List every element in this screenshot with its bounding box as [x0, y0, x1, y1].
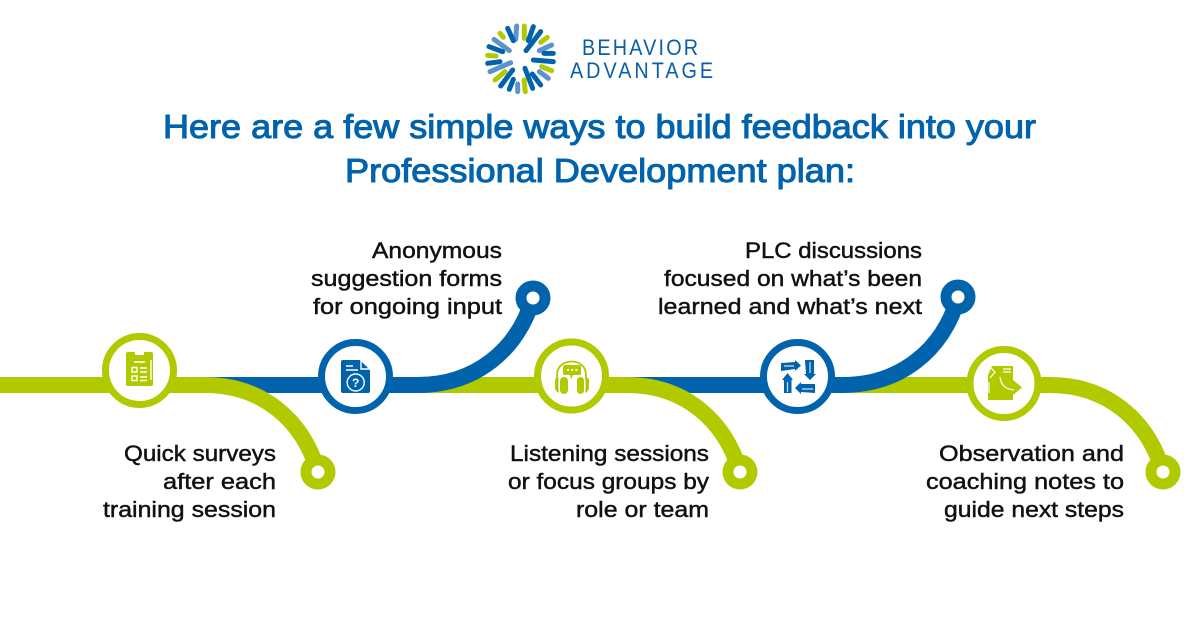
- step 3 text: or focus groups by: [508, 469, 709, 494]
- blue curve to step 4 end: [822, 298, 958, 385]
- step 1 text: after each: [163, 469, 276, 494]
- green curve to step 3 end: [596, 385, 740, 472]
- logo wordmark: BEHAVIOR: [582, 36, 698, 60]
- step 1 text: [103, 441, 276, 522]
- end dot 2: [521, 286, 545, 310]
- step 4 text: [658, 238, 922, 319]
- logo mark: radiating rays: [488, 26, 553, 92]
- end dot 5: [1151, 460, 1175, 484]
- end dot 1: [306, 460, 330, 484]
- node 2: document question icon: ?: [352, 376, 359, 390]
- node 2: document question icon: [322, 342, 390, 410]
- step 1 text: training session: [103, 497, 276, 522]
- node 1: clipboard survey icon: [106, 336, 174, 404]
- node 5: notes arrow icon: [970, 350, 1038, 418]
- step 3 text: role or team: [576, 497, 709, 522]
- step 1 text: Quick surveys: [124, 441, 276, 466]
- node 3: headset chat icon: [538, 342, 606, 410]
- green curve to step 1 end: [165, 385, 318, 472]
- end dot 4: [946, 285, 970, 309]
- step 3 text: Listening sessions: [510, 441, 709, 466]
- blue curve to step 2 end: [380, 298, 533, 385]
- node 4: cycle arrows icon: [764, 342, 832, 410]
- step 2 text: [311, 238, 502, 319]
- blue and green straight segments: [0, 377, 1004, 393]
- green curve to step 5 end: [1028, 385, 1163, 472]
- title: Professional Development plan:: [345, 152, 855, 189]
- step 2 text: Anonymous: [372, 238, 502, 263]
- step 5 text: guide next steps: [944, 497, 1124, 522]
- logo wordmark: [570, 36, 713, 83]
- step 5 text: coaching notes to: [926, 469, 1124, 494]
- logo: [488, 26, 713, 92]
- step 5 text: Observation and: [939, 441, 1124, 466]
- step 5 text: [926, 441, 1124, 522]
- timeline: [0, 298, 1163, 472]
- title: Here are a few simple ways to build feedback into your: [163, 108, 1036, 145]
- step 2 text: suggestion forms: [311, 266, 502, 291]
- step 4 text: focused on what’s been: [664, 266, 922, 291]
- step 4 text: PLC discussions: [745, 238, 922, 263]
- step 2 text: for ongoing input: [313, 294, 502, 319]
- step 4 text: learned and what’s next: [658, 294, 922, 319]
- end dot 3: [728, 460, 752, 484]
- step 3 text: [508, 441, 709, 522]
- title: [163, 108, 1036, 189]
- logo wordmark: ADVANTAGE: [570, 59, 713, 83]
